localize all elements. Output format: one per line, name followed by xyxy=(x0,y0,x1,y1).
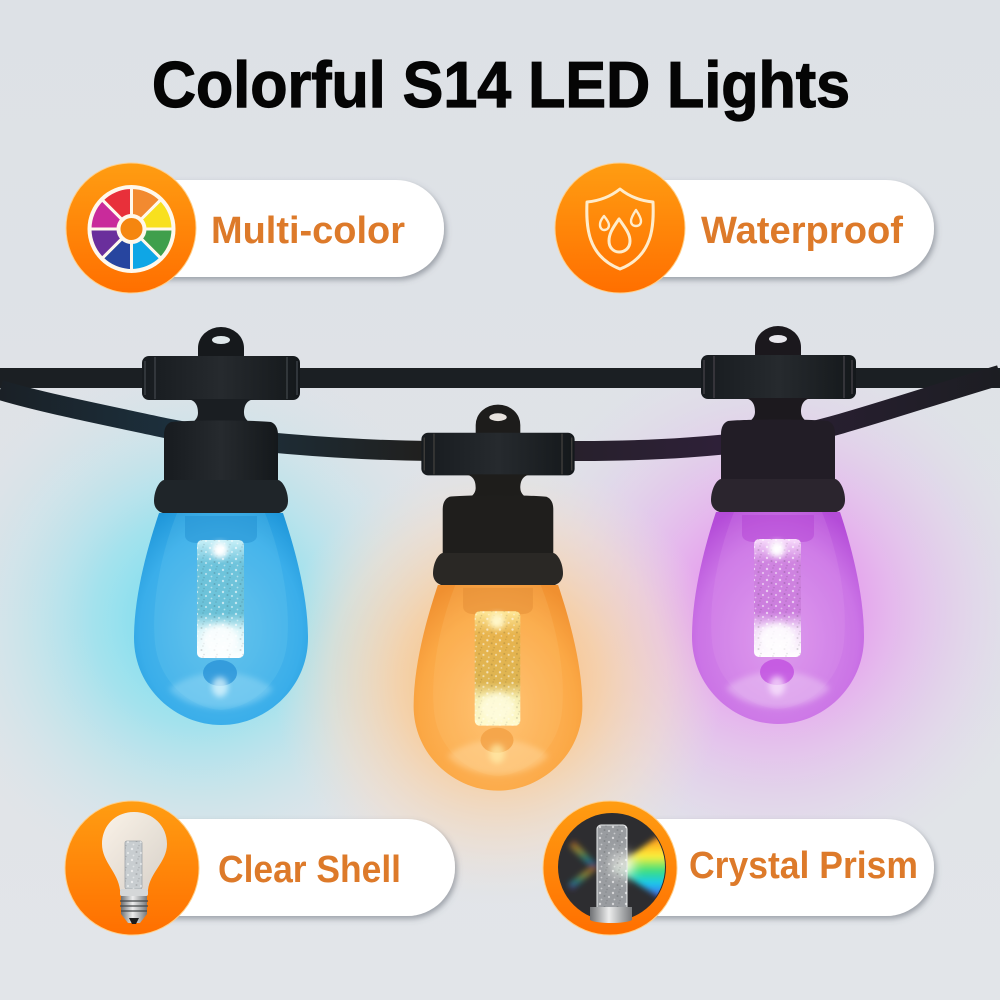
title: Colorful S14 LED Lights xyxy=(152,48,850,121)
icon: shield with water drops xyxy=(587,189,653,269)
label: clear shell: Clear Shell xyxy=(218,849,401,891)
icon: crystal tube xyxy=(590,825,632,923)
pill: clear shell xyxy=(112,819,455,916)
glass: orange xyxy=(414,585,582,791)
glass: blue xyxy=(134,513,308,725)
label: multi-color: Multi-color xyxy=(211,210,405,252)
icon: dark disc xyxy=(558,813,666,921)
badge: multi-color xyxy=(66,163,444,293)
icon: orange circle xyxy=(66,163,196,293)
connector: blue xyxy=(142,327,300,514)
pill: crystal prism xyxy=(590,819,934,916)
icon: orange circle xyxy=(555,163,685,293)
wire: top straight xyxy=(0,368,1000,388)
bulb: orange xyxy=(414,405,582,791)
light string wires xyxy=(0,375,1000,451)
icon: clear light bulb xyxy=(102,812,167,924)
connector: purple xyxy=(701,326,856,513)
label: waterproof: Waterproof xyxy=(701,210,903,252)
badge: waterproof xyxy=(555,163,934,293)
pill: waterproof xyxy=(600,180,934,277)
icon: rainbow beams xyxy=(566,834,665,900)
bulb: purple xyxy=(692,326,864,724)
bulb: blue xyxy=(134,327,308,725)
pill: multi-color xyxy=(110,180,444,277)
icon: orange ring xyxy=(543,801,677,935)
wire: lower sagging xyxy=(0,375,1000,451)
connector: orange xyxy=(421,405,575,586)
icon: orange circle xyxy=(65,801,199,935)
badge: clear shell xyxy=(65,801,455,935)
badge: crystal prism xyxy=(543,801,934,935)
label: crystal prism: Crystal Prism xyxy=(689,845,918,887)
glass: purple xyxy=(692,512,864,724)
icon: colour wheel xyxy=(88,185,176,273)
